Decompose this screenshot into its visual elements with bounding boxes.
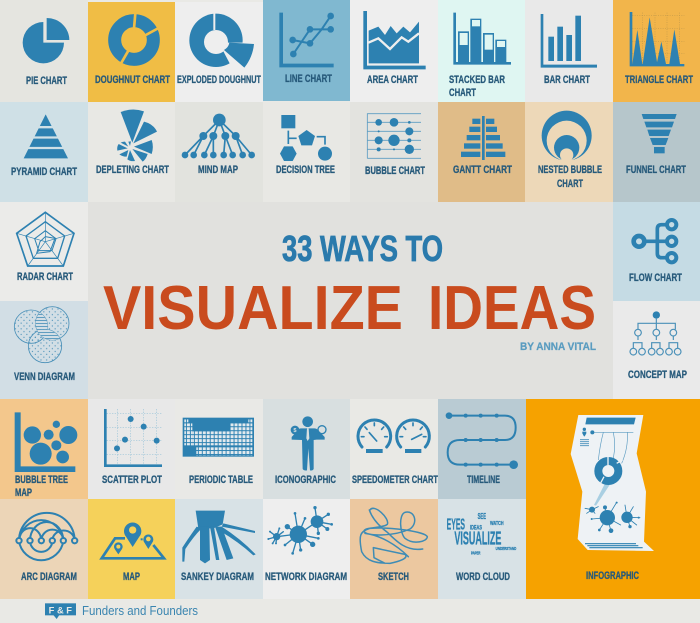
icon: nested bubble chart <box>542 111 592 162</box>
byline: BY ANNA VITAL <box>520 341 596 353</box>
label: periodic table: PERIODIC TABLE <box>189 474 253 486</box>
panel: flow chart <box>613 202 700 301</box>
panel: sankey diagram <box>175 499 263 599</box>
panel: arc diagram <box>0 499 88 599</box>
label: line chart: LINE CHART <box>285 73 332 85</box>
panel: bar chart <box>525 0 613 102</box>
footer: funders and founders <box>45 603 198 619</box>
icon: word cloud: PAPER <box>471 550 481 555</box>
icon: word cloud <box>447 511 517 555</box>
label: sketch: SKETCH <box>378 571 409 583</box>
label: gantt chart: GANTT CHART <box>453 164 512 176</box>
icon: scribble sketch <box>360 508 427 563</box>
label: infographic: INFOGRAPHIC <box>586 570 639 582</box>
panel: nested bubble chart <box>525 102 613 202</box>
label: stacked bar chart <box>449 74 505 99</box>
panel: pyramid chart <box>0 102 88 202</box>
panel: map <box>88 499 175 599</box>
panel: mind map <box>175 102 263 202</box>
label: nested bubble chart: CHART <box>557 178 583 190</box>
panel: doughnut chart <box>88 2 175 102</box>
icon: word cloud: VISUALIZE <box>454 527 501 548</box>
label: scatter plot: SCATTER PLOT <box>102 474 162 486</box>
panel: title area <box>88 202 613 399</box>
panel: bubble tree map <box>0 399 88 499</box>
icon: flow chart <box>634 220 676 262</box>
label: exploded doughnut: EXPLODED DOUGHNUT <box>177 74 261 86</box>
label: venn diagram: VENN DIAGRAM <box>14 371 75 383</box>
panel: sketch <box>350 499 438 599</box>
icon: timeline <box>446 412 518 469</box>
label: speedometer chart: SPEEDOMETER CHART <box>352 474 438 486</box>
label: decision tree: DECISION TREE <box>276 164 335 176</box>
icon: word cloud: EYES <box>447 516 465 533</box>
icon: businessman: $ <box>293 428 297 434</box>
label: mind map: MIND MAP <box>198 164 238 176</box>
panel: scatter plot <box>88 399 175 499</box>
panel: venn diagram <box>0 301 88 399</box>
panel: gantt chart <box>438 102 525 202</box>
icon: word cloud: UNDERSTAND <box>496 546 517 552</box>
label: bar chart: BAR CHART <box>544 74 590 86</box>
panel: word cloud <box>438 499 526 599</box>
label: pyramid chart: PYRAMID CHART <box>11 166 77 178</box>
panel: periodic table <box>175 399 263 499</box>
title: visualize ideas: VISUALIZE <box>103 274 403 343</box>
panel: speedometer chart <box>350 399 438 499</box>
label: nested bubble chart: NESTED BUBBLE <box>538 164 602 176</box>
label: bubble tree map: MAP <box>15 487 32 499</box>
label: pie chart: PIE CHART <box>26 75 67 87</box>
label: map: MAP <box>123 571 140 583</box>
panel: infographic <box>526 399 700 599</box>
label: sankey diagram: SANKEY DIAGRAM <box>181 571 254 583</box>
panel: timeline <box>438 399 526 499</box>
label: timeline: TIMELINE <box>467 474 500 486</box>
icon: mind map <box>182 114 255 158</box>
title: visualize ideas <box>103 274 596 343</box>
icon: doughnut chart <box>115 13 159 64</box>
icon: decision tree <box>280 115 332 161</box>
icon: bar chart <box>541 14 597 68</box>
icon: gantt chart <box>461 116 505 160</box>
brand name: Funders and Founders <box>82 603 198 618</box>
title: visualize ideas: IDEAS <box>428 274 596 343</box>
icon: pyramid chart <box>20 114 72 158</box>
panel: bubble chart <box>350 102 438 202</box>
icon: bubble chart <box>367 113 421 158</box>
label: area chart: AREA CHART <box>367 74 418 86</box>
icon: radar chart <box>17 212 74 266</box>
icon: map with pins <box>102 522 164 558</box>
panel: funnel chart <box>613 102 700 202</box>
label: stacked bar chart: CHART <box>449 87 476 99</box>
icon: network diagram <box>267 506 333 555</box>
icon: speedometers <box>358 420 429 453</box>
icon: area chart <box>363 11 426 69</box>
icon: logo: F&F <box>49 605 72 615</box>
label: doughnut chart: DOUGHNUT CHART <box>95 74 170 86</box>
icon: concept map <box>630 311 681 355</box>
label: word cloud: WORD CLOUD <box>456 571 510 583</box>
heading: 33 ways to: 33 WAYS TO <box>282 228 443 269</box>
icon: triangle chart <box>630 12 684 66</box>
label: iconographic: ICONOGRAPHIC <box>275 474 336 486</box>
icon: periodic table <box>183 418 254 457</box>
label: stacked bar chart: STACKED BAR <box>449 74 505 86</box>
panel: stacked bar chart <box>438 0 525 102</box>
icon: word cloud: IDEAS <box>470 524 482 531</box>
label: radar chart: RADAR CHART <box>17 271 73 283</box>
icon: word cloud: WATCH <box>490 521 504 527</box>
icon: logo <box>45 603 76 619</box>
icon: bubble tree map <box>15 412 77 472</box>
panel: line chart <box>263 0 350 101</box>
label: bubble tree map <box>15 474 68 499</box>
label: arc diagram: ARC DIAGRAM <box>21 571 77 583</box>
panel: exploded doughnut <box>175 2 263 102</box>
panel: iconographic <box>263 399 350 499</box>
label: depleting chart: DEPLETING CHART <box>96 164 169 176</box>
panel: network diagram <box>263 499 350 599</box>
icon: depleting chart <box>117 109 157 162</box>
panel: depleting chart <box>88 102 175 202</box>
icon: pie chart <box>23 18 69 63</box>
label: network diagram: NETWORK DIAGRAM <box>265 571 347 583</box>
icon: funnel chart <box>642 114 677 153</box>
icon: sankey diagram <box>182 511 256 563</box>
icon: word cloud: SEE <box>478 511 486 521</box>
panel: pie chart <box>0 0 88 102</box>
icon: exploded doughnut <box>189 13 263 72</box>
panel: decision tree <box>263 102 350 202</box>
icon: stacked bar chart <box>453 13 511 65</box>
panel: area chart <box>350 0 438 102</box>
panel: radar chart <box>0 202 88 301</box>
label: bubble tree map: BUBBLE TREE <box>15 474 68 486</box>
icon: infographic poster <box>571 415 654 551</box>
label: bubble chart: BUBBLE CHART <box>365 165 425 177</box>
panel: concept map <box>613 301 700 399</box>
panel: triangle chart <box>613 0 700 102</box>
label: nested bubble chart <box>538 164 602 190</box>
icon: scatter plot <box>104 409 162 467</box>
icon: line chart <box>279 13 334 67</box>
icon: venn diagram <box>14 303 69 363</box>
icon: arc diagram <box>16 513 77 560</box>
